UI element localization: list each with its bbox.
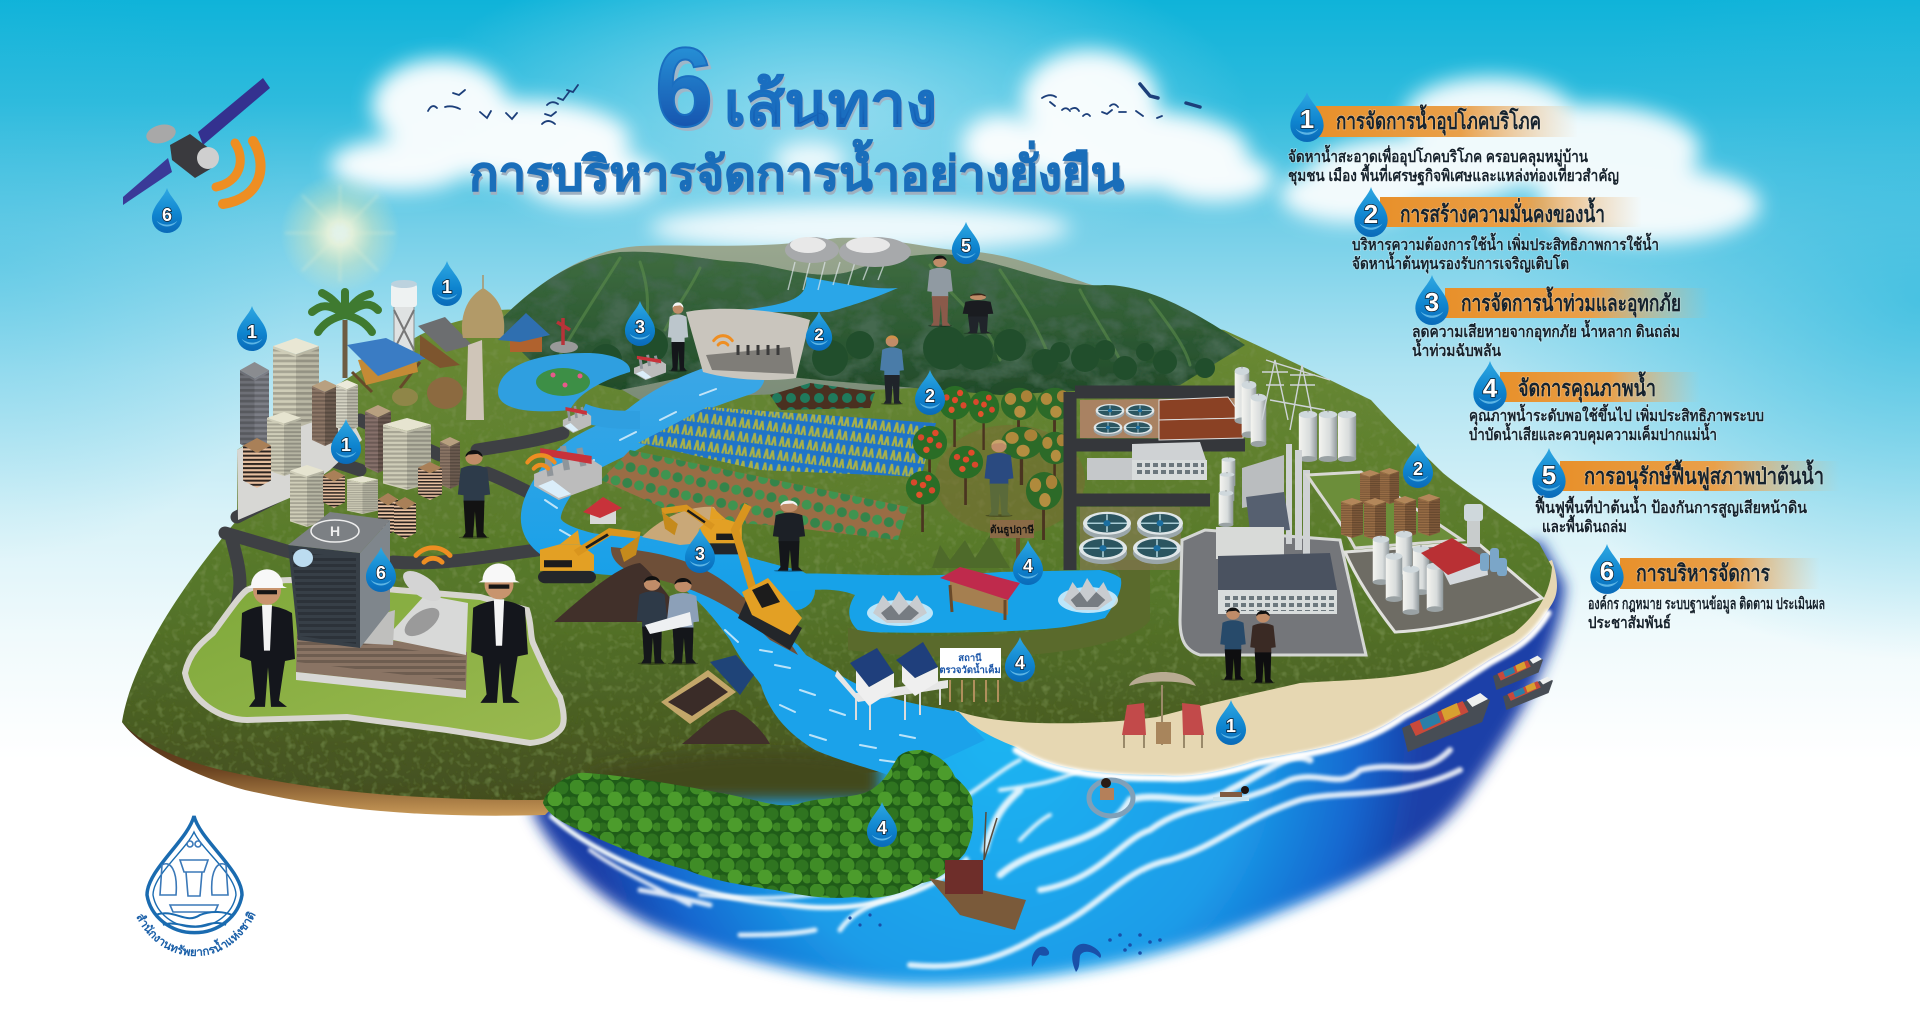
title	[469, 25, 1125, 203]
water statue	[466, 340, 484, 420]
podium roof	[297, 610, 395, 645]
legend item 2	[1352, 187, 1659, 274]
city buildings	[240, 338, 460, 539]
legend item 5: และพื้นดินถล่ม	[1542, 514, 1627, 536]
logo caption: สำนักงานทรัพยากรน้ำแห่งชาติ	[136, 912, 256, 956]
house roof	[850, 648, 894, 687]
orchard ground	[935, 425, 1085, 535]
farmer with hose	[880, 335, 904, 405]
concrete pad	[1180, 530, 1366, 655]
cloud: left of title	[330, 59, 660, 206]
sky right tint	[1490, 0, 1920, 660]
marker 4 lake: 4	[1023, 556, 1033, 576]
domed towers	[1219, 457, 1235, 527]
city pavement	[237, 405, 362, 520]
legend item 3: ลดความเสียหายจากอุทกภัย น้ำหลาก ดินถล่ม	[1412, 319, 1680, 342]
water tower	[391, 280, 417, 351]
tower: brown right	[440, 437, 460, 489]
legend item 1: การจัดการน้ำอุปโภคบริโภค	[1336, 104, 1541, 136]
blue tanks	[1480, 548, 1507, 576]
title: 6: 6	[658, 28, 716, 153]
engineer at dam	[668, 302, 688, 372]
stilt houses	[835, 642, 948, 730]
salinity station sign	[939, 648, 1001, 678]
beach	[955, 560, 1557, 776]
mangrove canopy	[543, 750, 973, 898]
marker 2 industry: 2	[1413, 459, 1423, 479]
marker 1 village	[432, 261, 462, 306]
logo drop inner	[153, 832, 236, 927]
marker 1 village: 1	[442, 277, 452, 297]
grey-roof hut	[418, 317, 472, 368]
legend item 3: น้ำท่วมฉับพลัน	[1412, 338, 1501, 360]
village houses	[347, 275, 578, 420]
legend item 5: 5	[1542, 460, 1556, 490]
tower: cream	[273, 338, 319, 428]
HQ lawn	[185, 580, 564, 743]
pump house	[583, 497, 622, 524]
silos lower	[1299, 410, 1356, 462]
dolphins	[1032, 944, 1101, 972]
dish	[144, 122, 178, 146]
smokestacks	[1286, 444, 1310, 560]
tower: brown centre	[365, 405, 391, 473]
soil mounds	[554, 563, 690, 622]
marker 1 city left: 1	[247, 322, 257, 342]
block: striped b	[323, 470, 345, 508]
signal arcs	[216, 141, 261, 204]
legend item 5: การอนุรักษ์ฟื้นฟูสภาพป่าต้นน้ำ	[1584, 459, 1824, 491]
deck	[835, 670, 948, 702]
reeds	[932, 535, 1010, 568]
mountain tree line	[590, 326, 1215, 380]
marker 4 mangrove: 4	[877, 818, 887, 838]
marker 3 dredging	[685, 528, 715, 573]
river channel upper	[541, 375, 795, 590]
transmission pylons	[1262, 360, 1330, 430]
tower windows	[292, 552, 356, 644]
mountain ridges	[560, 258, 1190, 365]
reservoir inlet	[582, 412, 640, 420]
legend item 5	[1532, 448, 1840, 536]
marker 2 dam	[806, 311, 832, 351]
reservoir	[730, 277, 898, 312]
satellite	[123, 78, 270, 205]
water treatment plant	[1070, 360, 1356, 570]
river system	[541, 375, 985, 780]
orange trees	[906, 386, 999, 532]
gardener	[985, 440, 1013, 517]
person planting	[963, 293, 993, 334]
cloud: behind legend	[1280, 77, 1760, 243]
official right	[471, 563, 528, 703]
legend item 2: 2	[1364, 199, 1378, 229]
logo drop outer	[147, 816, 242, 933]
excavator left	[538, 530, 640, 583]
legend item 3	[1412, 275, 1710, 360]
river ripples	[545, 389, 915, 762]
palm tree	[312, 292, 378, 378]
ships	[1402, 656, 1553, 752]
main building	[1218, 553, 1337, 614]
rain cloud	[785, 237, 911, 290]
legend item 2: บริหารความต้องการใช้น้ำ เพิ่มประสิทธิภาพการใช้น้ำ	[1352, 232, 1659, 254]
tower: brown	[312, 380, 338, 446]
sea	[530, 540, 1565, 985]
people	[240, 255, 1276, 707]
title: second line: การบริหารจัดการน้ำอย่างยั่งยืน	[470, 142, 1125, 203]
orchard	[906, 386, 1085, 540]
dishes	[398, 565, 446, 642]
block: striped d	[378, 493, 398, 535]
title: เส้นทาง: เส้นทาง	[725, 74, 938, 141]
block: cream lower right	[347, 476, 378, 514]
house walls	[856, 668, 894, 706]
power plant	[1180, 444, 1366, 655]
marker 6 HQ: 6	[376, 563, 386, 583]
floating pavilion	[940, 567, 1020, 620]
marker drop: satellite 6	[152, 188, 182, 233]
satellite body	[170, 134, 218, 178]
two women	[1220, 608, 1276, 684]
legend item 4: 4	[1483, 373, 1498, 403]
marker 5 forest	[952, 222, 980, 264]
deck chairs	[1122, 703, 1204, 748]
marker 6 HQ	[366, 547, 396, 592]
legend item 1: 1	[1300, 104, 1314, 134]
block: striped e	[394, 497, 416, 539]
sky glow behind title	[410, 0, 1250, 280]
logo caption arc	[136, 914, 256, 956]
dredged soil bar	[611, 547, 798, 655]
office	[1087, 442, 1207, 480]
soil mound front	[682, 710, 770, 744]
man drinking	[458, 450, 490, 539]
block: striped c	[418, 462, 442, 500]
sea foam waves	[590, 750, 1460, 966]
agency logo	[136, 816, 256, 956]
legend item 4: บำบัดน้ำเสียและควบคุมความเค็มปากแม่น้ำ	[1469, 422, 1717, 445]
title: 6: 6	[655, 25, 713, 150]
birds	[428, 84, 1200, 124]
woman watering	[927, 255, 953, 327]
legend item 4: คุณภาพน้ำระดับพอใช้ขึ้นไป เพิ่มประสิทธิภาพระบบ	[1469, 403, 1764, 426]
mangrove roots foam	[550, 815, 968, 908]
storage yard	[1307, 468, 1542, 632]
mid block	[1216, 527, 1284, 559]
clarifier tanks small	[1094, 404, 1154, 436]
sign stilts	[950, 680, 998, 702]
marker 4 sign: 4	[1015, 653, 1025, 673]
back mountain range	[500, 238, 1240, 400]
front mountains	[495, 252, 1245, 395]
marker 5 forest: 5	[961, 236, 971, 256]
block: cream lower	[290, 465, 324, 527]
antenna housing	[197, 147, 219, 169]
warehouse	[1421, 538, 1488, 585]
podium	[296, 630, 467, 690]
island ground	[122, 290, 1552, 800]
vegetable field	[601, 450, 908, 540]
excavator centre	[662, 506, 743, 554]
white tanks	[1373, 530, 1443, 615]
cloud: right of title	[962, 50, 1273, 202]
reed sign: ต้นธูปฤาษี: ต้นธูปฤาษี	[990, 524, 1034, 537]
red hand pump	[550, 318, 578, 353]
tower body	[288, 512, 390, 648]
lake	[770, 570, 1134, 633]
stilts	[856, 685, 940, 730]
roof deck	[393, 595, 468, 655]
haystack	[462, 275, 504, 338]
marker 4 sign	[1005, 637, 1035, 682]
vegetable field top	[770, 383, 875, 410]
block: cream right	[383, 418, 431, 490]
clay pot	[427, 377, 463, 409]
swimmer in ring	[1089, 778, 1133, 816]
tower: cream small	[336, 380, 358, 432]
green block	[1307, 472, 1462, 548]
basket	[392, 388, 418, 406]
HQ building	[288, 512, 468, 698]
title: เส้นทาง: เส้นทาง	[724, 71, 937, 138]
sky left tint	[0, 0, 300, 560]
podium base	[296, 672, 466, 698]
marker 2 farm	[915, 370, 945, 415]
building logo	[293, 549, 313, 567]
engineers reading plans	[637, 576, 699, 665]
logo waves	[155, 912, 232, 926]
beach foam line	[1016, 613, 1548, 778]
marker 4 lake	[1013, 540, 1043, 585]
salinity station sign: สถานี	[958, 652, 982, 664]
silos upper	[1235, 366, 1266, 447]
island soil edge	[122, 700, 570, 816]
truck	[661, 655, 754, 724]
legend item 5: ฟื้นฟูพื้นที่ป่าต้นน้ำ ป้องกันการสูญเสียหน้าดิน	[1535, 495, 1807, 519]
tower: grey	[240, 362, 269, 452]
legend item 3: การจัดการน้ำท่วมและอุทกภัย	[1461, 286, 1681, 318]
big gate	[534, 446, 602, 500]
wetland grass	[848, 560, 1150, 657]
yard water tower	[1464, 504, 1483, 547]
marker 2 farm: 2	[925, 386, 935, 406]
plant base lower	[1080, 507, 1182, 570]
logo crest	[160, 841, 228, 912]
rice paddy field	[638, 407, 936, 477]
legend item 1	[1288, 92, 1619, 186]
reed sign: ต้นธูปฤาษี	[990, 520, 1034, 565]
small gate lower	[563, 406, 591, 433]
excavator right	[735, 505, 802, 650]
legend item 6: ประชาสัมพันธ์	[1588, 613, 1671, 632]
legend item 6	[1588, 544, 1825, 632]
marker 1 city centre	[331, 419, 361, 464]
marker 1 beach: 1	[1226, 716, 1236, 736]
legend item 3: 3	[1425, 287, 1439, 317]
dam	[686, 309, 810, 380]
pond	[498, 353, 630, 411]
man pointing	[773, 500, 805, 572]
sludge beds	[1159, 397, 1243, 440]
solar panel: lower	[123, 158, 172, 205]
legend item 4: จัดการคุณภาพน้ำ	[1518, 371, 1656, 403]
aerators	[867, 578, 1118, 626]
brick stacks	[1341, 468, 1440, 540]
fish school	[848, 913, 1162, 955]
salinity station sign: ตรวจวัดน้ำเค็ม	[939, 662, 1001, 676]
legend	[1288, 92, 1840, 632]
block: striped a	[243, 438, 271, 488]
legend item 4	[1469, 361, 1764, 445]
plant road grid	[1070, 392, 1245, 570]
legend item 2: จัดหาน้ำต้นทุนรองรับการเจริญเติบโต	[1352, 251, 1569, 274]
swimmer on board	[1213, 786, 1249, 801]
legend item 6: 6	[1600, 556, 1614, 586]
second house walls	[902, 662, 938, 696]
legend item 1: จัดหาน้ำสะอาดเพื่ออุปโภคบริโภค ครอบคลุมหมู่บ้าน	[1288, 144, 1588, 168]
mangrove forest	[543, 750, 973, 908]
roads	[225, 420, 563, 618]
marker 1 city centre: 1	[341, 435, 351, 455]
tower body: H	[330, 523, 340, 539]
sand heap	[642, 507, 735, 545]
legend item 2: การสร้างความมั่นคงของน้ำ	[1400, 197, 1605, 227]
clarifier tanks large	[1079, 512, 1183, 564]
sun	[280, 173, 400, 293]
title: second line: การบริหารจัดการน้ำอย่างยั่งยืน	[469, 139, 1124, 200]
cloud: under title	[650, 142, 1070, 252]
marker 2 industry	[1403, 443, 1433, 488]
podium floors	[297, 635, 466, 682]
legend item 1: ชุมชน เมือง พื้นที่เศรษฐกิจพิเศษและแหล่งท่องเที่ยวสำคัญ	[1288, 163, 1619, 186]
fruit trees	[1001, 388, 1073, 540]
river channel lower	[640, 567, 985, 780]
small gate upper	[634, 355, 666, 380]
legend item 6: การบริหารจัดการ	[1636, 560, 1770, 586]
beach umbrella	[1129, 672, 1196, 745]
marker 1 city left	[237, 306, 267, 351]
map markers	[237, 222, 1433, 847]
blue house	[498, 313, 550, 352]
marker drop: satellite 6: 6	[162, 205, 172, 225]
marker 4 mangrove	[867, 802, 897, 847]
wifi icon: HQ	[416, 548, 450, 562]
wifi icon: gate	[527, 455, 555, 469]
official left	[240, 569, 295, 707]
clouds	[330, 50, 1760, 252]
plant base top	[1080, 398, 1240, 438]
marker 3 dam	[625, 301, 655, 346]
marker 3 dredging: 3	[695, 544, 705, 564]
second house roof	[896, 642, 938, 678]
blue-roof house	[347, 338, 427, 392]
marker 2 dam: 2	[814, 325, 824, 344]
marker 1 beach	[1216, 700, 1246, 745]
solar panel: upper	[198, 78, 270, 145]
dark grass near mangrove	[590, 752, 880, 800]
fishing boat	[929, 812, 1026, 930]
turbine hall	[1242, 455, 1290, 532]
block: cream	[267, 412, 301, 476]
yard pad	[1345, 545, 1542, 632]
marker 3 dam: 3	[635, 317, 645, 337]
